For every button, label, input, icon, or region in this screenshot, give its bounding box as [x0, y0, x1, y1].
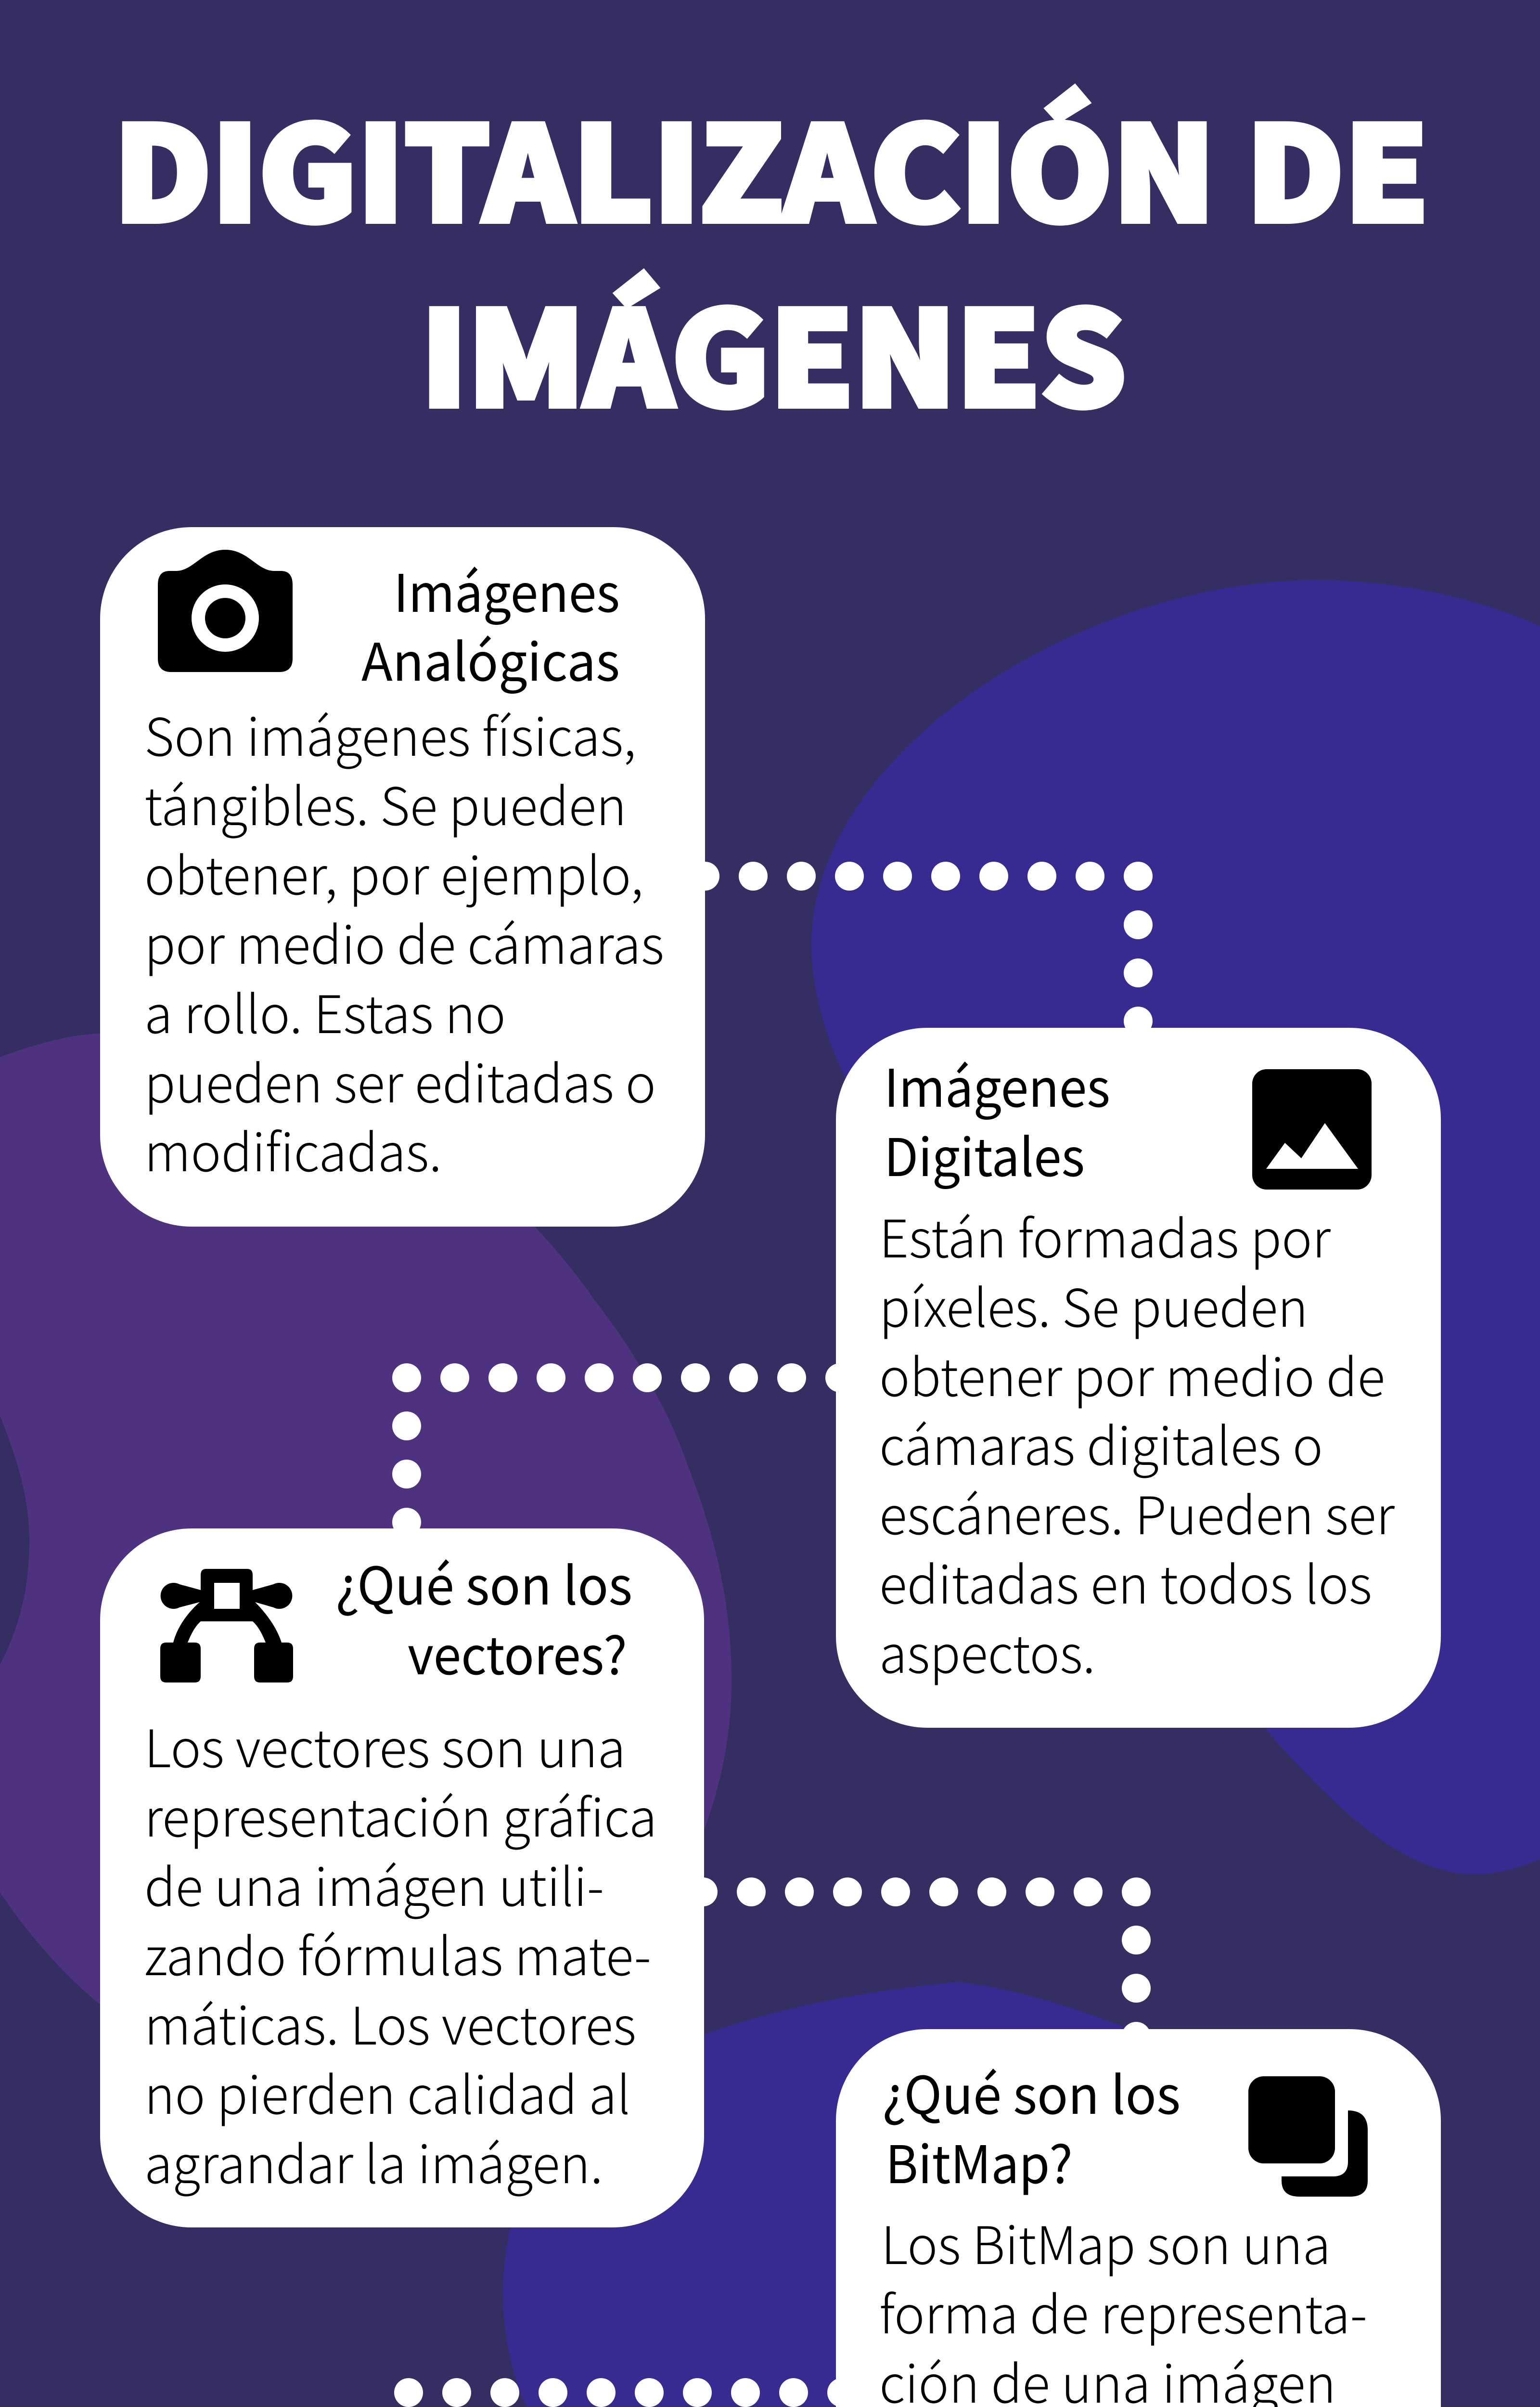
heading [361, 552, 620, 696]
connector: vectors to bitmap [689, 1877, 1151, 2051]
blob: purple left [0, 1033, 732, 2117]
body text: cámaras digitales o [879, 1405, 1323, 1480]
connector: analog to digital [691, 862, 1153, 1035]
body text: forma de representa- [879, 2274, 1367, 2349]
icon: picture [1252, 1069, 1372, 1190]
panel: qué son los bitmap [836, 2029, 1441, 2407]
body text: píxeles. Se pueden [879, 1267, 1308, 1342]
icon: vector curve [160, 1569, 293, 1682]
body text: escáneres. Pueden ser [879, 1475, 1395, 1550]
heading: BitMap? [886, 2123, 1073, 2199]
body text [879, 2204, 1377, 2407]
title [114, 70, 1429, 443]
panel: imágenes analógicas [100, 527, 705, 1227]
blob: indigo upper right [811, 580, 1540, 1874]
body text: máticas. Los vectores [144, 1985, 636, 2060]
body text: de una imágen utili- [144, 1846, 604, 1921]
title: IMÁGENES [421, 255, 1126, 443]
body text: modificadas. [144, 1112, 442, 1187]
body text: Los vectores son una [144, 1708, 626, 1783]
panel: qué son los vectores [100, 1528, 704, 2227]
body text [144, 696, 664, 1187]
heading: Digitales [884, 1116, 1085, 1191]
icon: camera [158, 550, 293, 672]
body text: Son imágenes físicas, [144, 696, 636, 771]
body text: Los BitMap son una [881, 2204, 1331, 2279]
icon: stacked copies [1248, 2076, 1368, 2197]
body text [144, 1708, 657, 2199]
body text: zando fórmulas mate- [144, 1915, 651, 1991]
heading [335, 1545, 632, 1690]
connector: bitmap to digitalization [394, 2378, 856, 2407]
body text: a rollo. Estas no [144, 973, 506, 1048]
heading: ¿Qué son los [335, 1545, 632, 1620]
heading [884, 1047, 1110, 1191]
heading: Imágenes [884, 1047, 1110, 1122]
body text: Están formadas por [879, 1198, 1331, 1273]
body text: tángibles. Se pueden [144, 765, 627, 841]
body text [879, 1198, 1395, 1688]
body text: pueden ser editadas o [144, 1043, 656, 1118]
body text: obtener, por ejemplo, [144, 835, 643, 910]
body text: por medio de cámaras [144, 904, 664, 979]
blob: indigo middle [503, 1982, 1316, 2407]
heading: Imágenes [394, 552, 620, 627]
heading: ¿Qué son los [882, 2054, 1181, 2129]
title: DIGITALIZACIÓN DE [114, 70, 1429, 259]
body text: agrandar la imágen. [144, 2123, 603, 2199]
body text: representación gráfica [144, 1777, 657, 1852]
heading: vectores? [408, 1615, 627, 1690]
body text: no pierden calidad al [144, 2054, 630, 2129]
heading [882, 2054, 1181, 2199]
panel: imágenes digitales [836, 1028, 1441, 1728]
heading: Analógicas [361, 621, 620, 696]
body text: obtener por medio de [879, 1336, 1385, 1411]
connector: digital to vectors [392, 1363, 854, 1537]
body text: aspectos. [879, 1613, 1095, 1688]
body text: editadas en todos los [879, 1544, 1372, 1619]
